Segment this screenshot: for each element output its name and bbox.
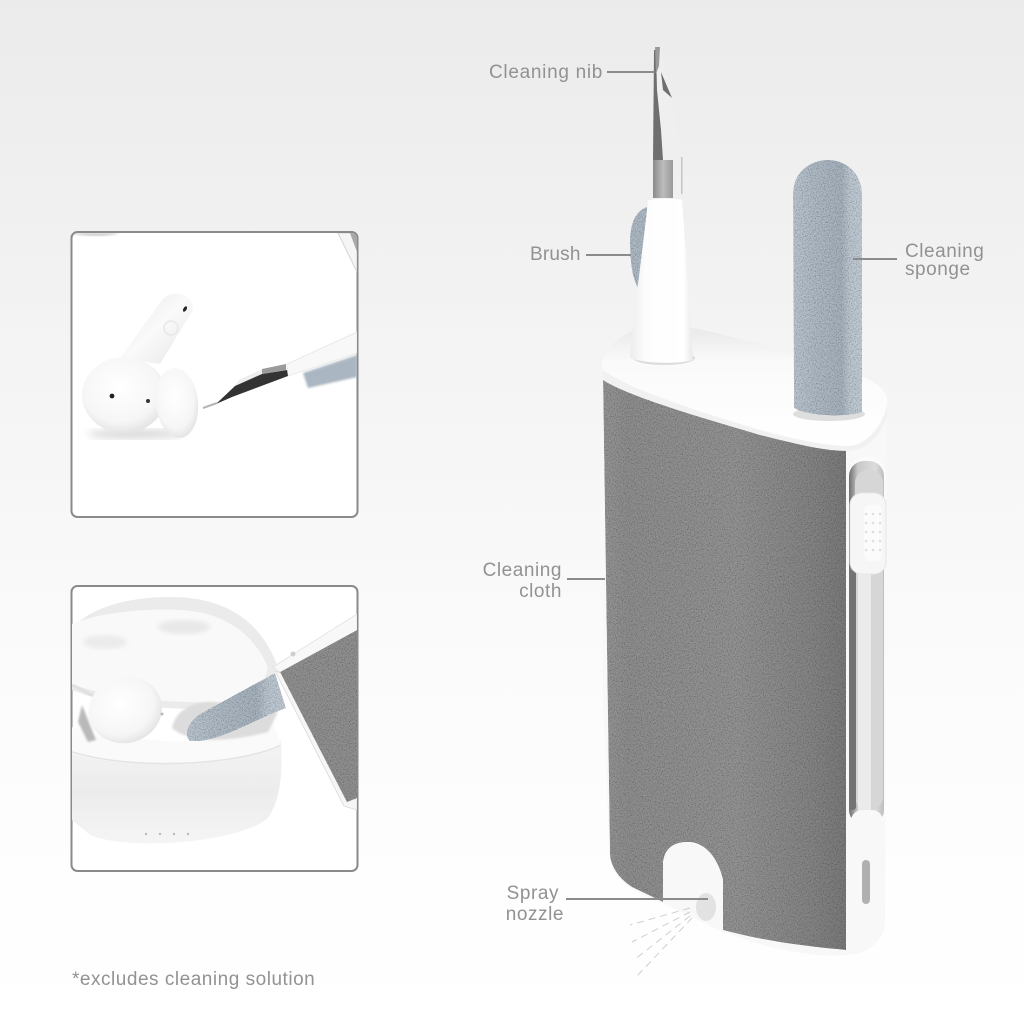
label: cleaning cloth: Cleaning (483, 560, 562, 581)
footnote: *excludes cleaning solution (72, 969, 315, 990)
cleaning pen (630, 47, 693, 363)
icon: corner of the cleaning pen (72, 233, 357, 272)
label: spray nozzle (506, 883, 708, 925)
label: spray nozzle: Spray (507, 883, 559, 904)
panel: cleaning the earbud with the nib (72, 232, 358, 517)
slider button (850, 493, 886, 574)
panel: cleaning the case with the sponge (60, 586, 358, 871)
icon: cleaning cloth device (273, 614, 357, 810)
icon: open case lid (60, 597, 277, 709)
cleaning nib blade (653, 47, 678, 160)
icon: case base (66, 702, 282, 843)
label: cleaning cloth: cloth (519, 581, 562, 602)
side slot (849, 457, 885, 832)
cleaning sponge (793, 160, 862, 415)
label: cleaning sponge: Cleaning (905, 241, 984, 262)
spray notch interior (663, 842, 723, 930)
icon: earbud (82, 293, 202, 440)
brush bristles (630, 207, 647, 297)
cleaning cloth surface (603, 378, 846, 950)
icon: cleaning sponge in case (187, 673, 286, 741)
label: cleaning sponge (853, 241, 984, 280)
label: spray nozzle: nozzle (506, 904, 564, 925)
icon: spray nozzle (696, 893, 716, 921)
spray mist lines (630, 908, 692, 976)
small slit (862, 860, 870, 904)
shadow under earbud (87, 429, 183, 439)
icon: earbud in case (88, 686, 164, 744)
cleaning kit device (602, 47, 887, 976)
device top cap (602, 326, 887, 451)
device body, white shell (603, 376, 887, 956)
label: cleaning cloth (483, 560, 605, 602)
pen metal shaft (653, 160, 673, 198)
pen white body (630, 199, 693, 363)
label: cleaning nib: Cleaning nib (489, 62, 603, 83)
icon: cleaning pen nib (203, 332, 357, 408)
label: brush (530, 244, 631, 265)
label: cleaning sponge: sponge (905, 259, 971, 280)
label: brush: Brush (530, 244, 581, 265)
